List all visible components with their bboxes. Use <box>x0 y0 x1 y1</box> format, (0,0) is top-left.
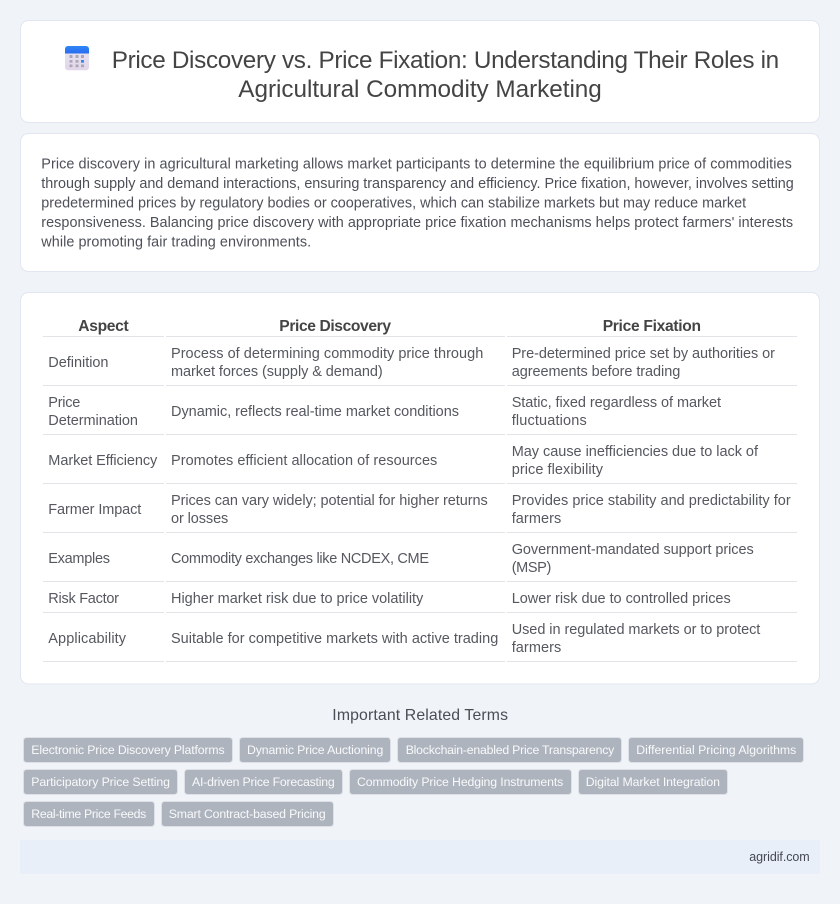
title: Price Discovery vs. Price Fixation: Understanding Their Roles in <box>112 47 779 74</box>
table row: definition: Definition <box>48 355 108 371</box>
title: Agricultural Commodity Marketing <box>238 76 602 103</box>
table row: definition: Pre-determined price set by authorities or <box>512 346 775 362</box>
table row: risk factor <box>43 591 797 613</box>
panel: header <box>20 20 820 122</box>
table row: applicability: Applicability <box>48 631 127 647</box>
table row: market efficiency: May cause inefficiencies due to lack of <box>512 444 759 460</box>
tag: Commodity Price Hedging Instruments: Commodity Price Hedging Instruments <box>357 775 563 789</box>
panel: related term tags <box>24 738 804 826</box>
text block: introduction: while promoting fair trading environments. <box>40 234 311 250</box>
panel: comparison table <box>20 292 820 684</box>
tag: Real-time Price Feeds: Real-time Price Feeds <box>31 807 146 821</box>
tag: Electronic Price Discovery Platforms: Electronic Price Discovery Platforms <box>31 743 225 757</box>
tag: Participatory Price Setting: Participatory Price Setting <box>31 775 170 789</box>
table row: price determination: fluctuations <box>512 413 587 429</box>
table row: examples: Commodity exchanges like NCDEX, CME <box>171 551 429 567</box>
text block: introduction: responsiveness. Balancing price discovery with appropriate price fixation mechanisms helps protect farmers' interests <box>41 215 793 231</box>
table row: definition <box>43 346 797 386</box>
tag: Blockchain-enabled Price Transparency <box>398 738 622 762</box>
table header row <box>43 318 797 337</box>
tag: Digital Market Integration: Digital Market Integration <box>586 775 720 789</box>
table row: risk factor: Lower risk due to controlled prices <box>512 591 731 607</box>
tag: Real-time Price Feeds <box>24 802 154 826</box>
tag: Differential Pricing Algorithms <box>628 738 804 762</box>
table row: examples: Government-mandated support prices <box>512 542 754 558</box>
tag: AI-driven Price Forecasting: AI-driven Price Forecasting <box>192 775 335 789</box>
table row: farmer impact <box>43 493 797 533</box>
table row: definition: market forces (supply & demand) <box>171 364 383 380</box>
table row: applicability: farmers <box>512 640 561 656</box>
text block: introduction: predetermined prices by regulatory bodies or cooperatives, which can stabilize markets but may reduce market <box>41 195 746 211</box>
table row: price determination: Price <box>48 395 80 411</box>
title <box>112 47 779 103</box>
tag: Dynamic Price Auctioning <box>240 738 390 762</box>
tag: Participatory Price Setting <box>24 770 178 794</box>
panel: introduction text <box>20 134 820 272</box>
table row: farmer impact: Farmer Impact <box>48 502 141 518</box>
table row: examples <box>43 542 797 582</box>
icon: calendar <box>65 46 89 70</box>
table row: price determination <box>43 395 797 435</box>
tag: Smart Contract-based Pricing: Smart Contract-based Pricing <box>169 807 326 821</box>
tag: Differential Pricing Algorithms: Differential Pricing Algorithms <box>636 743 796 757</box>
footer: agridif.com <box>749 850 810 864</box>
text block: introduction <box>40 156 794 250</box>
tag: Digital Market Integration <box>578 770 728 794</box>
table row: examples: Examples <box>48 551 110 567</box>
tag: Blockchain-enabled Price Transparency: Blockchain-enabled Price Transparency <box>406 743 615 757</box>
table row: price determination: Determination <box>48 413 138 429</box>
table row: price determination: Dynamic, reflects real-time market conditions <box>171 404 459 420</box>
table row: applicability <box>43 622 797 662</box>
tag: Electronic Price Discovery Platforms <box>24 738 232 762</box>
table row: definition: agreements before trading <box>512 364 680 380</box>
table row: risk factor: Risk Factor <box>48 591 119 607</box>
tag: AI-driven Price Forecasting <box>184 770 342 794</box>
tag: Commodity Price Hedging Instruments <box>350 770 572 794</box>
heading: important related terms: Important Related Terms <box>332 707 508 724</box>
tag: Smart Contract-based Pricing <box>162 802 334 826</box>
table header row: Price Discovery <box>279 318 391 335</box>
table row: risk factor: Higher market risk due to price volatility <box>171 591 424 607</box>
footer <box>20 840 820 874</box>
table row: market efficiency: Market Efficiency <box>48 453 158 469</box>
table row: price determination: Static, fixed regardless of market <box>512 395 721 411</box>
table row: market efficiency <box>43 444 797 484</box>
table row: examples: (MSP) <box>512 560 551 576</box>
table row: market efficiency: Promotes efficient allocation of resources <box>171 453 437 469</box>
tag: Dynamic Price Auctioning: Dynamic Price Auctioning <box>247 743 383 757</box>
text block: introduction: Price discovery in agricultural marketing allows market participants to determine the equilibrium price of commodities <box>41 156 792 172</box>
table header row: Aspect <box>78 318 129 335</box>
table row: definition: Process of determining commodity price through <box>171 346 483 362</box>
table row: applicability: Used in regulated markets or to protect <box>512 622 760 638</box>
table row: farmer impact: farmers <box>512 511 561 527</box>
table row: applicability: Suitable for competitive markets with active trading <box>171 631 498 647</box>
text block: introduction: through supply and demand interactions, ensuring transparency and efficiency. Price fixation, however, involves setting <box>41 176 794 192</box>
table row: farmer impact: or losses <box>171 511 228 527</box>
table row: farmer impact: Provides price stability and predictability for <box>512 493 791 509</box>
table row: market efficiency: price flexibility <box>512 462 604 478</box>
table header row: Price Fixation <box>603 318 701 335</box>
table row: farmer impact: Prices can vary widely; potential for higher returns <box>171 493 488 509</box>
